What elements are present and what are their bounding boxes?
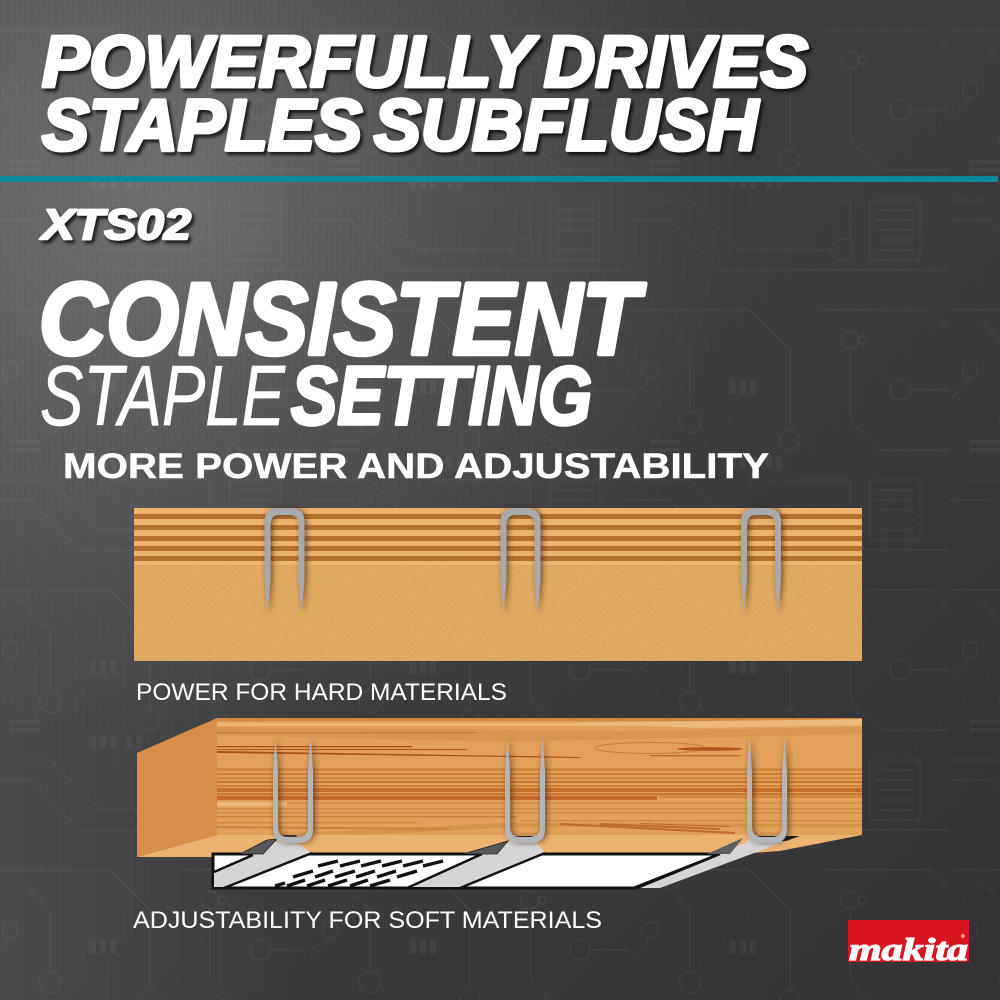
wood front face with grain [217,718,862,835]
panel: soft material cross-section [137,718,862,888]
staple 6 [747,737,787,843]
caption: adjustability for soft materials: ADJUSTABILITY FOR SOFT MATERIALS [133,907,602,934]
headline: consistent staple setting: STAPLE [40,349,286,444]
staple 2 [500,508,540,615]
title: powerfully drives staples subflush [42,22,808,166]
fold band 3 [637,836,800,888]
fold band 2 [407,841,545,887]
logo: makita: makita [849,931,968,967]
wood knot [560,742,743,834]
striped hard layers [134,508,862,565]
fold band 1 [214,842,312,887]
staple 3 [741,508,781,615]
perforation dashes [275,861,443,886]
model number: XTS02 [40,201,191,249]
teal divider line [0,176,998,182]
logo: makita [848,920,969,967]
drywall panel [213,835,800,888]
staple 4 [273,737,313,843]
caption: power for hard materials: POWER FOR HARD MATERIALS [136,679,507,706]
headline: consistent staple setting: SETTING [291,349,592,442]
title: powerfully drives staples subflush: POWERFULLY DRIVES [42,22,808,102]
wood underside [137,835,862,857]
staple 1 [264,508,304,615]
panel: hard material cross-section [134,508,862,661]
title: powerfully drives staples subflush: STAPLES SUBFLUSH [42,86,760,166]
headline: consistent staple setting [39,262,646,444]
foam board layer [134,565,862,661]
staple 5 [505,737,545,843]
wood side face [137,718,217,857]
subheading: MORE POWER AND ADJUSTABILITY [63,447,769,486]
headline: consistent staple setting: CONSISTENT [39,262,646,376]
